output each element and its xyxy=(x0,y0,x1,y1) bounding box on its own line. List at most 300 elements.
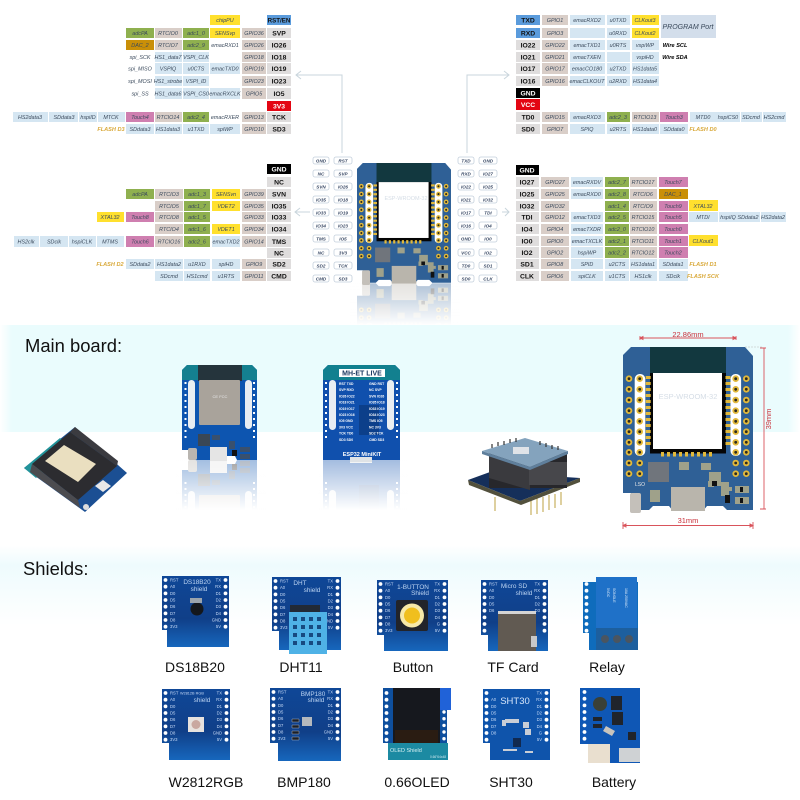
pin chips: left: IO35 xyxy=(316,197,326,202)
shield: SHT30: D2 xyxy=(537,710,543,716)
arrow: bottom right xyxy=(502,208,509,216)
photo: board back: ESP32 MiniKIT xyxy=(343,452,382,458)
shield: W2812RGB xyxy=(162,689,243,790)
shield: W2812RGB: D2 xyxy=(217,710,223,716)
shield: Button xyxy=(377,580,448,675)
shield: DS18B20: D1 xyxy=(216,591,222,596)
pin chips: right: TDI xyxy=(484,210,492,215)
row: SD3: SDdata3 xyxy=(130,127,150,133)
shield: DS18B20: DS18B20 xyxy=(183,579,211,586)
row: IO32: Touch9 xyxy=(664,204,682,210)
shield: 0.66OLED: OLED Shield xyxy=(390,748,422,754)
shield: BMP180: GND xyxy=(324,730,333,734)
row: TMS: GPIO14 xyxy=(244,240,264,246)
row: SD1: HS1data1 xyxy=(631,262,655,268)
pin table: top right xyxy=(516,15,786,134)
shield: 0.66OLED: 0.66"64x48 xyxy=(430,755,446,759)
shield: W2812RGB: D3 xyxy=(217,717,223,722)
shield: DHT11: GND xyxy=(324,618,333,624)
row: TCK: TCK xyxy=(272,114,286,122)
shield: BMP180: D2 xyxy=(328,710,334,714)
shield: TF Card: shield xyxy=(516,590,533,597)
row: IO19: u0CTS xyxy=(188,66,205,72)
shield: DHT11: TX xyxy=(328,578,333,584)
shield: W2812RGB: 5V xyxy=(217,737,222,742)
pin table: bottom right xyxy=(516,165,786,281)
row: IO2: GPIO2 xyxy=(547,250,563,256)
row: IO35: IO35 xyxy=(272,204,287,210)
row: IO32: IO32 xyxy=(520,204,535,210)
row: GND xyxy=(516,88,540,98)
row: SD0: HS1data0 xyxy=(633,127,657,133)
row: SD0: SDdata0 xyxy=(664,127,684,133)
row: IO0: emacTXCLK xyxy=(572,239,603,245)
shield: DS18B20: 5V xyxy=(216,624,221,629)
row: IO22: u0RTS xyxy=(610,43,627,49)
shield: Relay: SONGLE xyxy=(612,588,616,603)
row: IO18: VSPI_CLK xyxy=(183,55,209,61)
shield: W2812RGB: A0 xyxy=(170,697,176,702)
photo: board back: NC 3V3 xyxy=(369,425,381,429)
row: IO32 xyxy=(516,200,718,211)
arrow: bottom left xyxy=(295,208,310,216)
shield: Relay: 10A 250VAC xyxy=(624,588,628,608)
photo: board back: SD2 TCK xyxy=(369,432,384,436)
row: IO25 xyxy=(516,189,688,199)
row: SD1: SPID xyxy=(581,262,593,268)
shield: W2812RGB: D5 xyxy=(170,710,176,716)
row: VCC xyxy=(516,99,540,110)
row: SVP: adcPA xyxy=(132,31,148,37)
shield: DHT11: D5 xyxy=(280,598,286,604)
row: IO33: adc1_5 xyxy=(188,215,207,221)
pin chips: left: SVP xyxy=(338,171,349,176)
shield: DS18B20: D4 xyxy=(216,611,222,616)
shield: DHT11: D4 xyxy=(328,612,334,617)
row: IO34: GPIO34 xyxy=(244,227,264,233)
row: IO35: VDET2 xyxy=(217,204,235,210)
shield: SHT30 xyxy=(483,689,550,790)
row: CLK: spiCLK xyxy=(578,274,596,280)
shield: TF Card: RX xyxy=(534,588,540,593)
row: SD3: u1TXD xyxy=(188,127,204,133)
row: IO0: CLKout1 xyxy=(693,239,713,245)
pin chips: right: IO22 xyxy=(461,184,471,189)
shield: SHT30: D8 xyxy=(491,730,497,736)
row: SD3: GPIO10 xyxy=(244,127,264,133)
row: IO32: XTAL32 xyxy=(692,204,713,210)
shield: TF Card: D3 xyxy=(535,608,541,613)
shield: BMP180: 3V3 xyxy=(278,736,286,741)
row: IO34: adc1_6 xyxy=(188,227,206,233)
shield: Button: 3V3 xyxy=(385,628,393,633)
shield: DHT11 xyxy=(272,577,341,675)
dimension: 31mm xyxy=(623,516,753,529)
row: IO16: GPIO16 xyxy=(545,79,565,85)
pinout board: ESP-WROOM-32 xyxy=(384,196,428,202)
pin chips: right: CLK xyxy=(483,276,493,281)
pin chips: left: IO26 xyxy=(338,184,348,189)
shield: BMP180: D1 xyxy=(328,703,334,708)
shield: BMP180: D5 xyxy=(278,710,284,714)
board reflection: pinout board xyxy=(350,281,460,403)
row: IO26: RTCIO7 xyxy=(158,43,179,49)
row: IO21: GPIO21 xyxy=(545,55,565,61)
row: SD3: FLASH D3 xyxy=(97,127,126,133)
pin chips: right: IO17 xyxy=(461,210,471,215)
row: GND: GND xyxy=(520,90,536,98)
row: SVP: GPIO36 xyxy=(244,31,264,37)
shield: TF Card: D6 xyxy=(489,608,495,613)
row: SVN: adc1_3 xyxy=(188,192,206,198)
row: IO16: HS1data4 xyxy=(633,79,657,85)
photo: angled board with headers xyxy=(24,427,127,512)
shield: W2812RGB: D4 xyxy=(217,724,223,729)
shield: DS18B20: RX xyxy=(215,584,221,589)
row: IO26: GPIO26 xyxy=(244,43,264,49)
row: SVN: RTCIO3 xyxy=(159,192,179,198)
row: CLK: SDclk xyxy=(666,274,680,280)
shield: Button: D6 xyxy=(385,608,391,613)
arrow: top left xyxy=(296,71,342,153)
row: IO25: emacRXD0 xyxy=(573,192,601,198)
row: IO17: GPIO17 xyxy=(545,66,566,72)
row: CLK: FLASH SCK xyxy=(687,274,720,280)
shield: DHT11: D2 xyxy=(328,598,334,604)
shield: Button: RX xyxy=(434,588,440,593)
shield: BMP180: BMP180 xyxy=(301,691,326,698)
row: IO23: spi_MOSI xyxy=(128,79,152,85)
pin chips: left: SD2 xyxy=(317,263,326,268)
row: IO22: emacTXD1 xyxy=(574,43,600,49)
shield: W2812RGB: D0 xyxy=(170,704,176,709)
row: IO23: HS1_strobe xyxy=(154,79,182,85)
shield: DHT11: A0 xyxy=(280,585,286,590)
pin chips: left: SD3 xyxy=(339,276,348,281)
row: CLK: CLK xyxy=(520,274,534,280)
row: IO25: IO25 xyxy=(520,192,535,198)
shield: Button: 1-BUTTON xyxy=(397,584,429,591)
row: IO17 xyxy=(516,63,659,74)
photo: board back xyxy=(323,365,400,462)
row: SD0 xyxy=(516,124,718,134)
row: IO2: adc2_2 xyxy=(608,250,626,256)
photo: board back: SD3 SD0 xyxy=(339,438,353,442)
row: IO25: adc2_8 xyxy=(608,192,626,198)
row: TMS: RTCIO16 xyxy=(158,240,180,246)
row: IO33: RTCIO8 xyxy=(159,215,179,221)
row: IO19: emacTXD0 xyxy=(212,66,238,72)
row: IO18: GPIO18 xyxy=(244,55,264,61)
row: TDI: TDI xyxy=(522,214,533,222)
shield: DHT11: shield xyxy=(304,587,321,594)
row: IO21: IO21 xyxy=(521,54,536,62)
shield: W2812RGB: RST xyxy=(170,690,179,696)
row: IO19: VSPIQ xyxy=(160,66,177,72)
photo: board back: IO34 IO23 xyxy=(369,413,385,417)
shield: SHT30: D5 xyxy=(491,710,497,716)
pin chips: right: TXD xyxy=(461,158,471,163)
row: TXD: emacRXD2 xyxy=(573,18,601,24)
pin chips: left: RST xyxy=(338,158,349,163)
row: 3V3: 3V3 xyxy=(273,104,285,110)
shield: DS18B20: D8 xyxy=(170,618,176,622)
row: SD2: spiHD xyxy=(219,262,233,268)
row: IO27: RTCIO17 xyxy=(632,180,655,186)
pinout section xyxy=(13,15,786,403)
row: TMS: emacTXD2 xyxy=(213,240,239,246)
photo: dimensioned board: ESP-WROOM-32 xyxy=(659,392,717,401)
row: IO25: DAC_1 xyxy=(664,192,682,198)
row: TMS: SDclk xyxy=(47,240,61,246)
row: IO32: GPIO32 xyxy=(545,204,565,210)
row: CMD: u1RTS xyxy=(218,274,235,280)
row: IO18: HS1_data7 xyxy=(155,55,182,61)
photo: board back: IO5 GND xyxy=(339,419,353,423)
row: IO26 xyxy=(126,40,291,50)
photo: board back: RST TXD xyxy=(339,382,354,386)
row: IO4: emacTXDR xyxy=(573,227,601,233)
shield: DS18B20: A0 xyxy=(170,584,176,589)
row: SD2: SDdata2 xyxy=(130,262,150,268)
shield: SHT30: D3 xyxy=(537,717,543,722)
label: 0.66OLED: 0.66OLED xyxy=(384,774,450,790)
shield: Button: D3 xyxy=(435,608,441,613)
shield: BMP180: D3 xyxy=(328,716,334,721)
row: TMS: adc2_6 xyxy=(188,240,206,246)
shield: W2812RGB: D8 xyxy=(170,730,176,736)
shield: TF Card xyxy=(481,580,548,675)
row: TD0: RTCIO13 xyxy=(634,115,656,121)
row: IO19: IO19 xyxy=(272,66,287,73)
row: TXD: TXD xyxy=(521,18,535,24)
row: IO5: emacRXCLK xyxy=(209,92,241,98)
shield: BMP180: A0 xyxy=(278,696,284,701)
shield: DHT11: D8 xyxy=(280,618,286,624)
label: SHT30: SHT30 xyxy=(489,774,533,790)
row: IO4: Touch0 xyxy=(664,227,682,233)
shield: BMP180: TX xyxy=(328,690,333,694)
row: IO27 xyxy=(516,177,688,187)
row: TD0: emacRXD3 xyxy=(573,115,601,121)
photo: board back: MH-ET LIVE xyxy=(342,371,382,378)
row: IO0: IO0 xyxy=(522,238,533,246)
row: SD2: FLASH D2 xyxy=(96,262,125,268)
row: IO0: RTCIO11 xyxy=(632,239,654,245)
shield: DS18B20: D3 xyxy=(216,604,222,609)
row: IO35: GPIO35 xyxy=(244,204,265,210)
row: TMS: MTMS xyxy=(102,240,118,246)
row: SD0: FLASH D0 xyxy=(689,127,718,133)
row: SVN xyxy=(126,189,291,199)
shield: Button: TX xyxy=(435,582,440,586)
reflection: back board xyxy=(318,458,408,560)
row: IO21 xyxy=(516,52,688,62)
shield: Button: Shield xyxy=(411,590,429,597)
row: NC: NC xyxy=(274,250,284,258)
shield: DS18B20: D7 xyxy=(170,611,176,616)
row: IO32: RTCIO9 xyxy=(633,204,653,210)
row: TDI: RTCIO15 xyxy=(632,215,655,221)
shield: Button: D7 xyxy=(385,615,391,620)
row: TCK: emacRXER xyxy=(211,115,239,121)
photo: dimensioned board: LSO xyxy=(635,482,645,488)
row: IO22: GPIO22 xyxy=(545,43,565,49)
row: IO2: hspiWP xyxy=(578,250,597,256)
row: CMD: HS1cmd xyxy=(187,274,208,280)
pin chips: right: RXD xyxy=(461,171,472,176)
pin chips: right: IO27 xyxy=(483,171,493,176)
label: DS18B20: DS18B20 xyxy=(165,659,225,675)
shield: Button: D8 xyxy=(385,622,391,626)
pin chips: left: IO18 xyxy=(338,197,348,202)
shield: Button: D2 xyxy=(435,602,441,606)
pin chips: left: IO33 xyxy=(316,210,326,215)
row: IO0: GPIO0 xyxy=(547,239,563,245)
row: RST/EN: RST/EN xyxy=(268,18,291,24)
row: SVP: SENSvp xyxy=(215,31,235,37)
shield: SHT30: D7 xyxy=(491,724,497,729)
pin chips: left: NC xyxy=(318,250,325,255)
row: SD2: SD2 xyxy=(272,262,286,268)
shield: BMP180: 5V xyxy=(328,736,333,741)
row: TDI xyxy=(516,212,786,222)
shield: DS18B20 xyxy=(162,576,229,675)
shield: Button: D5 xyxy=(385,602,391,606)
shield: W2812RGB: D7 xyxy=(170,724,176,729)
shield: W2812RGB: GND xyxy=(213,730,222,736)
pin chips: right: IO2 xyxy=(484,250,492,255)
row: IO33: Touch8 xyxy=(131,215,149,221)
shield: Relay xyxy=(583,577,638,675)
row: IO22 xyxy=(516,40,688,50)
row: TCK: SDdata3 xyxy=(54,115,74,121)
pin chips: left: IO19 xyxy=(338,210,348,215)
row: SVN: adcPA xyxy=(132,192,148,198)
row: SD2 xyxy=(96,259,291,269)
row: TCK: HS2data3 xyxy=(18,115,42,121)
pin chips: right: IO0 xyxy=(484,236,492,241)
shield: BMP180: D0 xyxy=(278,703,284,708)
row: IO23 xyxy=(128,76,291,86)
pin chips: left: TCK xyxy=(338,263,348,268)
panel: shields xyxy=(0,545,800,790)
shield: DHT11: D0 xyxy=(280,592,286,597)
row: IO16: u2RXD xyxy=(609,79,627,85)
row: SD0: SD0 xyxy=(521,126,535,134)
shield: DHT11: D7 xyxy=(280,612,286,617)
shield: BMP180: D4 xyxy=(328,723,334,728)
photo: stacked board with shield xyxy=(468,438,580,515)
shield: Button: RST xyxy=(385,582,394,586)
shield: TF Card: RST xyxy=(489,582,498,586)
row: IO5: HS1_data6 xyxy=(155,92,181,98)
row: SD2: GPIO9 xyxy=(246,262,262,268)
row: IO2: Touch2 xyxy=(664,250,682,256)
photo: board back: TMS IO5 xyxy=(369,419,383,423)
pin chips: left: IO34 xyxy=(316,223,326,228)
row: IO26: adc2_9 xyxy=(187,43,205,49)
row: CLK xyxy=(516,271,720,281)
row: SVN: SENSvn xyxy=(216,192,236,198)
row: IO33: XTAL32 xyxy=(99,215,120,221)
row: IO0: adc2_1 xyxy=(608,239,626,245)
row: IO21: vspiHD xyxy=(636,55,654,61)
row: IO5: VSPI_CS0 xyxy=(183,92,209,98)
row: CMD xyxy=(155,271,291,281)
shield: DHT11: D6 xyxy=(280,605,286,610)
pin chips: left: SVN xyxy=(316,184,326,189)
row: IO17: emacCO180 xyxy=(572,66,602,72)
row: SVP xyxy=(126,28,291,38)
row: GND: GND xyxy=(271,166,287,174)
dimension: 39mm: 39mm xyxy=(764,409,773,429)
row: IO34: VDET1 xyxy=(217,227,235,233)
shield: Button: D1 xyxy=(435,595,441,600)
row: TCK: Touch4 xyxy=(131,115,149,121)
pin chips: left: IO5 xyxy=(339,236,347,241)
pin table: bottom left xyxy=(14,164,291,281)
shield: W2812RGB: W2812B RGB xyxy=(180,692,204,696)
row: IO27: Touch7 xyxy=(664,180,683,186)
shield: Button: D4 xyxy=(435,615,441,620)
program port block: PROGRAM Port xyxy=(663,24,715,31)
photo: board back: IO18 IO21 xyxy=(339,401,355,405)
dimension: 31mm: 31mm xyxy=(678,516,698,525)
row: IO26: DAC_2 xyxy=(131,43,149,49)
row: SD3: spiWP xyxy=(217,127,233,133)
row: IO2 xyxy=(516,247,688,258)
label: W2812RGB: W2812RGB xyxy=(169,774,243,790)
shield: W2812RGB: RX xyxy=(216,697,222,702)
row: GND: GND xyxy=(519,168,535,174)
row: IO16: emacCLKOUT xyxy=(569,79,605,85)
row: TMS xyxy=(14,236,291,247)
row: SVP: adc1_0 xyxy=(187,31,205,37)
label: BMP180: BMP180 xyxy=(277,774,331,790)
shield: BMP180: RX xyxy=(327,696,333,701)
row: IO0: Touch1 xyxy=(664,239,682,245)
shield: DS18B20: 3V3 xyxy=(170,624,178,629)
label: DHT11: DHT11 xyxy=(279,659,323,675)
row: IO27: GPIO27 xyxy=(545,180,566,186)
row: IO21: emacTXEN xyxy=(573,55,601,61)
row: CLK: u1CTS xyxy=(609,274,626,280)
shield: SHT30: D0 xyxy=(491,704,497,709)
row: RXD: u0RXD xyxy=(609,31,627,37)
row: VCC: VCC xyxy=(521,102,535,109)
row: SD0: u2RTS xyxy=(610,127,627,133)
shield: SHT30: D4 xyxy=(537,724,543,729)
pin chips: left: GND xyxy=(316,158,327,163)
photo: board back: SVP RXD xyxy=(339,388,354,392)
row: TDI: GPIO12 xyxy=(545,215,565,221)
row: IO25: RTCIO6 xyxy=(633,192,653,198)
photo: board back: TCK TD0 xyxy=(339,432,353,436)
shield: Button: A0 xyxy=(385,588,391,593)
row: RST/EN: chipPU xyxy=(216,18,234,24)
row: GND xyxy=(516,165,539,175)
pinout board xyxy=(357,163,451,285)
pin table: top left xyxy=(13,15,291,134)
shield: DHT11: D3 xyxy=(328,605,334,610)
pin chips: right xyxy=(458,157,497,282)
arrow: top right xyxy=(467,71,509,153)
row: SVN: GPIO39 xyxy=(244,192,264,198)
row: TMS: Touch6 xyxy=(131,240,149,246)
shield: W2812RGB: TX xyxy=(217,690,222,696)
pin chips: right: GND xyxy=(483,158,494,163)
